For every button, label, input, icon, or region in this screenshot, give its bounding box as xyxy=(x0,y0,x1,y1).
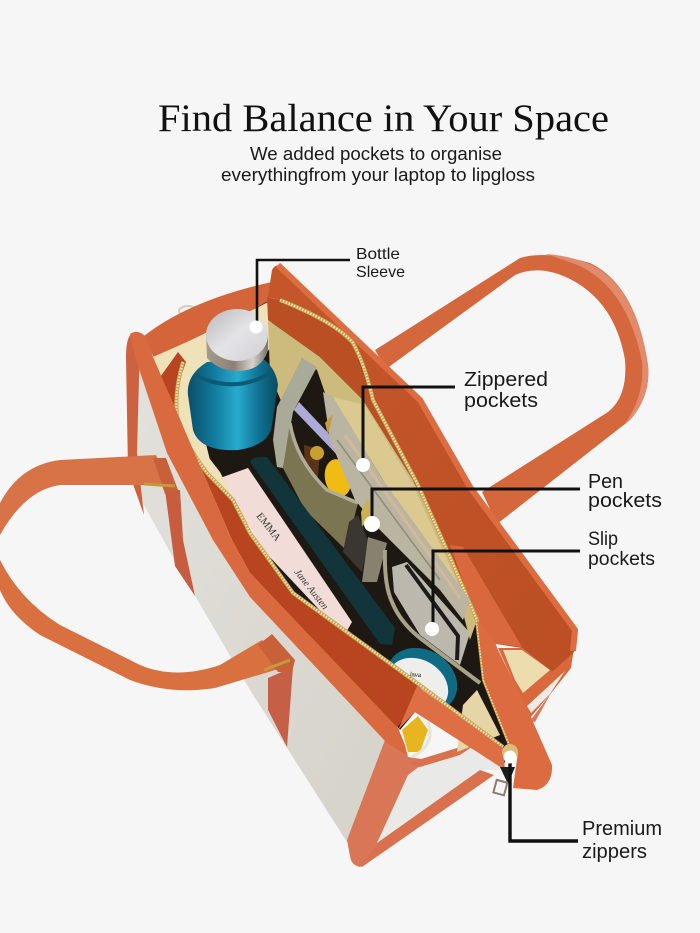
slip pocket xyxy=(385,550,480,683)
front zipper xyxy=(176,362,503,747)
title: Find Balance in Your Space xyxy=(158,97,609,140)
cream pouch xyxy=(457,690,500,752)
teal notebook xyxy=(250,457,395,645)
ring xyxy=(179,306,197,316)
top back rim xyxy=(144,282,272,358)
pen pockets xyxy=(343,497,387,582)
subtitle: We added pockets to organise xyxy=(250,144,502,164)
yellow item xyxy=(402,716,430,757)
side cream lining xyxy=(503,650,550,693)
book text xyxy=(254,511,330,612)
book text: EMMA xyxy=(254,511,283,544)
bag illustration xyxy=(0,254,648,867)
callout: premium zippers xyxy=(504,750,662,863)
left edge strip xyxy=(126,333,144,515)
bottle cap xyxy=(206,309,268,371)
callout: bottle sleeve xyxy=(250,246,405,334)
bag body end panel xyxy=(347,722,505,867)
jar: lava xyxy=(410,672,422,679)
interior base xyxy=(158,300,510,768)
callout: zippered pockets: pockets xyxy=(464,389,538,412)
callout: bottle sleeve: Sleeve xyxy=(356,264,405,281)
callout: zippered pockets: Zippered xyxy=(464,368,548,391)
left strap xyxy=(165,490,195,596)
front handle xyxy=(0,455,282,690)
callout: premium zippers: Premium xyxy=(582,818,662,840)
callout: bottle sleeve: Bottle xyxy=(356,246,400,263)
bag body front panel xyxy=(130,360,395,842)
callout: pen pockets: pockets xyxy=(588,490,662,512)
subtitle xyxy=(221,144,535,185)
gold cosmetic xyxy=(304,445,324,477)
callout: pen pockets: Pen xyxy=(588,471,623,493)
strap tabs xyxy=(153,458,295,672)
callout: pen pockets xyxy=(364,471,662,532)
callout: zippered pockets xyxy=(356,368,548,472)
cream lining xyxy=(153,300,272,480)
back lining xyxy=(268,320,477,640)
inner cream lining xyxy=(181,395,233,498)
back zipper xyxy=(280,300,510,745)
back wall xyxy=(268,265,576,672)
organiser pocket band xyxy=(273,358,317,468)
callout: slip pockets: pockets xyxy=(588,549,655,570)
wallet xyxy=(392,562,470,665)
callout: premium zippers: zippers xyxy=(582,841,647,863)
lavender box xyxy=(294,402,347,459)
end panel corner xyxy=(498,648,574,722)
back handle xyxy=(375,254,648,524)
book text: Jane Austen xyxy=(292,567,330,612)
front rim xyxy=(130,332,408,757)
jar xyxy=(375,635,469,725)
book xyxy=(220,468,352,636)
buckles xyxy=(144,484,290,670)
olive pocket xyxy=(283,423,358,550)
callout: slip pockets xyxy=(425,529,655,636)
right zip tab xyxy=(477,620,552,790)
subtitle: everythingfrom your laptop to lipgloss xyxy=(221,165,535,185)
zip pull xyxy=(325,414,333,435)
front zip strip xyxy=(398,686,505,770)
yellow lip balm xyxy=(321,457,355,499)
zipper pull xyxy=(493,744,518,795)
water bottle xyxy=(188,309,278,450)
back inner flap xyxy=(267,297,417,483)
zippered pocket stripes xyxy=(323,392,470,620)
callout: slip pockets: Slip xyxy=(588,529,618,550)
front inner flap xyxy=(158,352,423,728)
right strap xyxy=(268,667,293,747)
